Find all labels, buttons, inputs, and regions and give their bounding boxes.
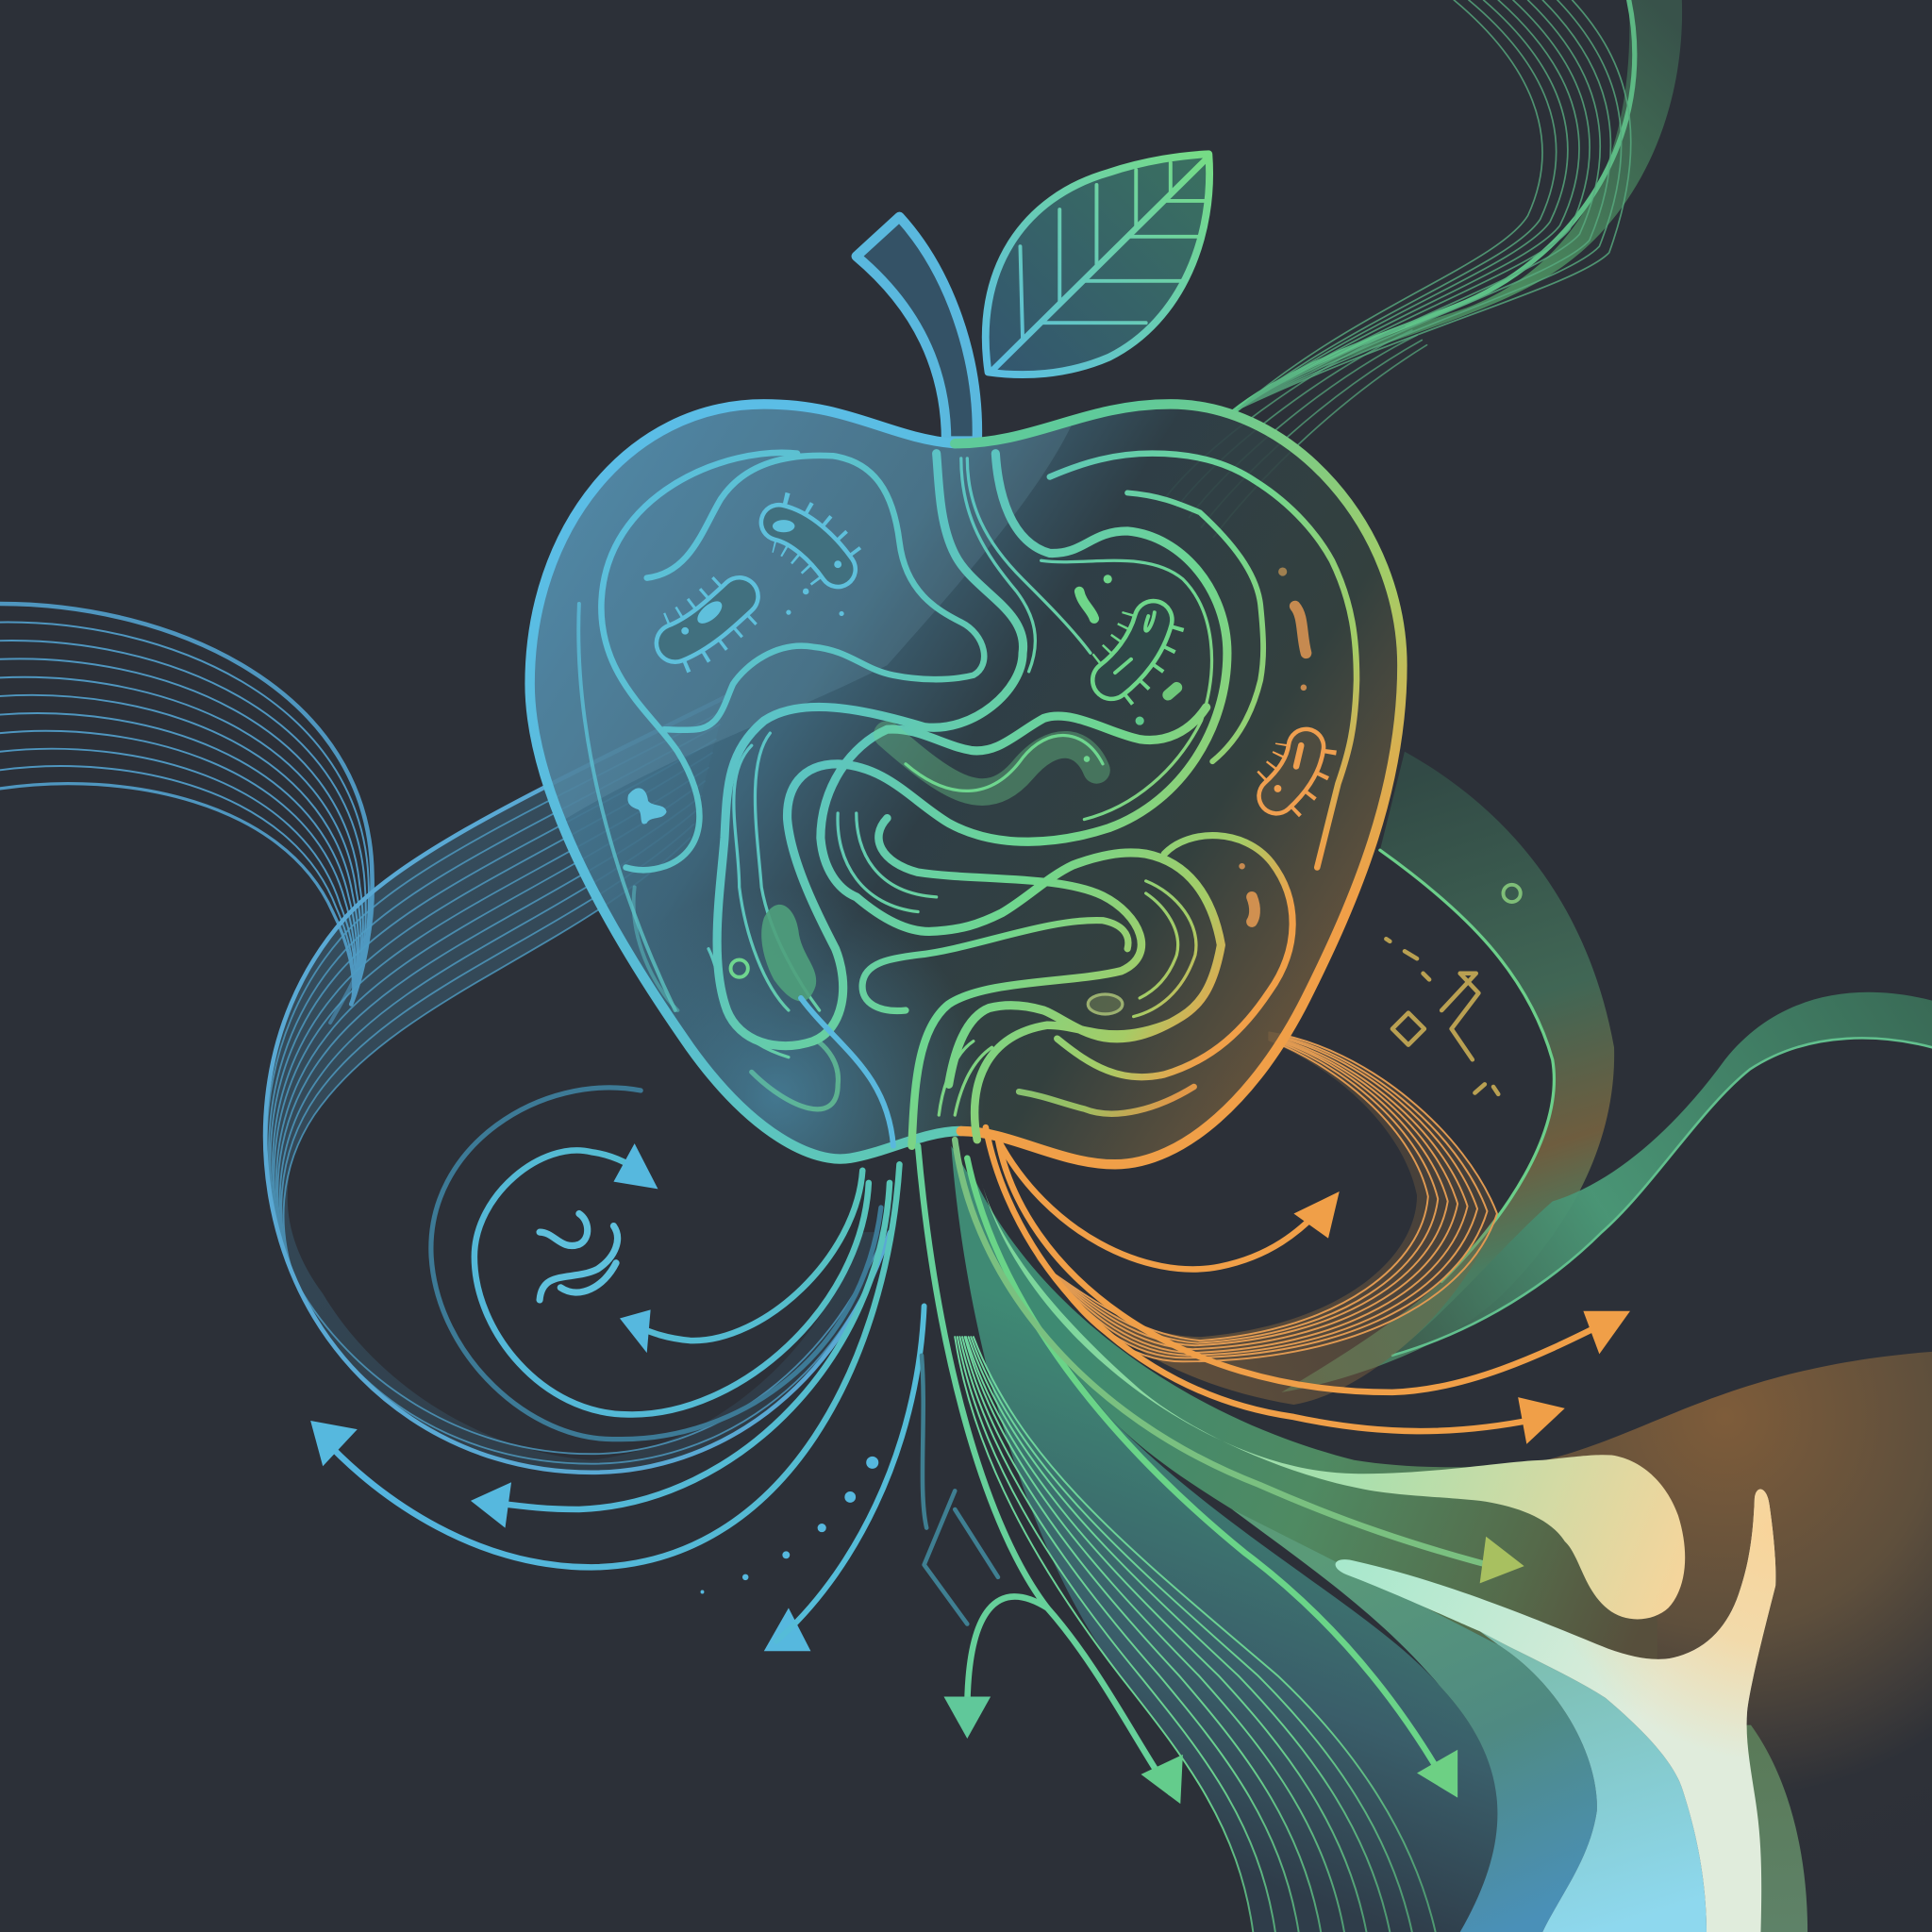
- apple leaf: [986, 154, 1209, 375]
- orange arrows: [986, 1127, 1630, 1444]
- apple stem: [857, 217, 977, 441]
- bacterium left: [675, 596, 740, 643]
- yellow green loop: [821, 708, 1221, 1084]
- swirl icon: [540, 1214, 618, 1300]
- right green ribbon: [1281, 752, 1614, 1392]
- bottom right flowing wave: [951, 1146, 1932, 1932]
- orange fan ribbon: [1035, 1033, 1497, 1405]
- orange bacterial marks: [1239, 567, 1307, 922]
- apple sheen: [535, 409, 1072, 819]
- bacterium right orange: [1274, 745, 1306, 796]
- green meanders: [878, 818, 1141, 1146]
- fine inner lines: [708, 458, 1211, 1115]
- bacterium top: [773, 520, 844, 616]
- right lobe: [1058, 836, 1292, 1077]
- center blue arrow and vein: [776, 1306, 998, 1641]
- translucent worm in gut: [887, 734, 1103, 792]
- green flow lines and arrows: [918, 1140, 1524, 1804]
- top right ribbon: [1164, 0, 1682, 537]
- apple body: [525, 399, 1407, 1170]
- blue arrow heads: [310, 1143, 810, 1651]
- dots trail: [701, 1457, 878, 1593]
- right side ring and glyph marks: [1386, 885, 1521, 1094]
- small cell in gut: [1088, 994, 1123, 1014]
- winding gut lines inside apple: [578, 453, 1357, 1146]
- left top fan ribbon: [0, 604, 373, 1023]
- main tube: [717, 454, 1227, 1046]
- apple lower left tint: [653, 916, 964, 1155]
- bacterium right green: [1079, 575, 1176, 725]
- left large ribbon loop: [265, 696, 890, 1473]
- green thin line fan: [955, 1337, 1436, 1932]
- small cyan blob: [627, 788, 667, 824]
- blue spiral arrow lines: [321, 1088, 899, 1567]
- left lobe: [601, 453, 797, 870]
- far right ribbon: [1392, 992, 1932, 1356]
- green pod and ring: [731, 905, 893, 1146]
